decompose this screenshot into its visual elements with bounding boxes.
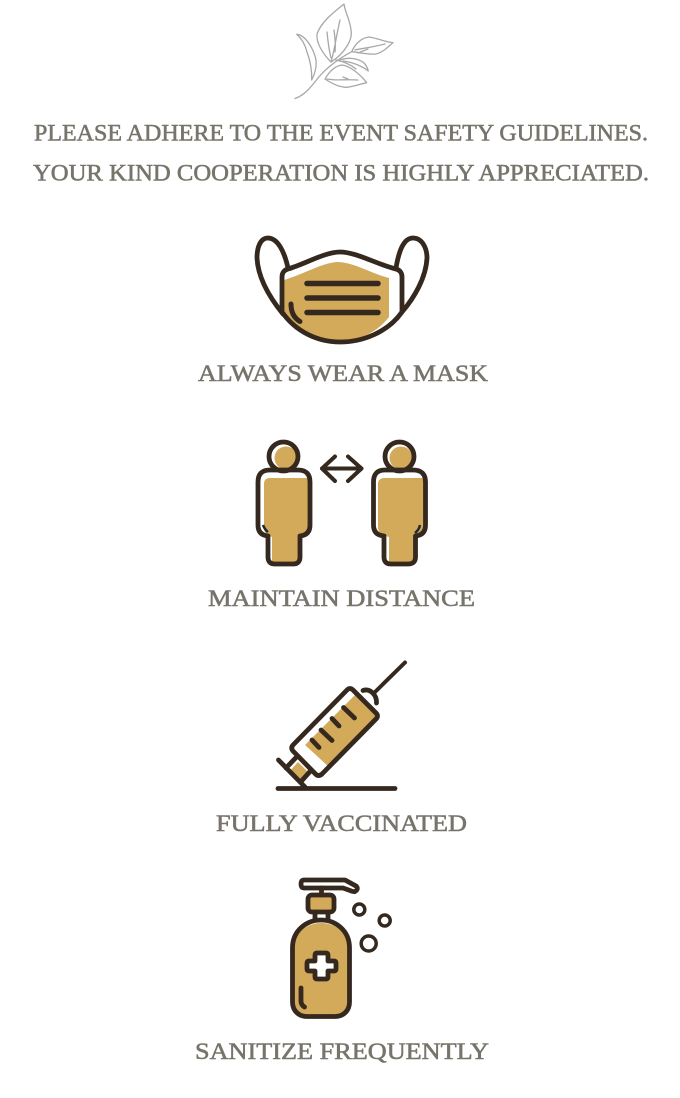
label: distance: MAINTAIN DISTANCE: [208, 586, 475, 612]
icon: syringe: [278, 662, 405, 788]
icon: face mask: [257, 238, 427, 342]
intro text: [33, 120, 649, 186]
icon: two people with distance arrow: [258, 442, 426, 564]
label: sanitize: SANITIZE FREQUENTLY: [195, 1039, 489, 1065]
text line 2: YOUR KIND COOPERATION IS HIGHLY APPRECIATED.: [33, 160, 649, 186]
icon: leaf sprig: [295, 4, 393, 98]
icon: sanitizer bottle: [292, 880, 390, 1016]
label: mask: ALWAYS WEAR A MASK: [198, 361, 488, 387]
label: vaccinated: FULLY VACCINATED: [216, 811, 467, 837]
icon: bubbles: [354, 904, 390, 951]
person left: [258, 442, 310, 564]
arrow: double headed: [322, 456, 362, 481]
text line 1: PLEASE ADHERE TO THE EVENT SAFETY GUIDELINES.: [34, 120, 648, 146]
person right: [374, 442, 426, 564]
icon: medical cross: [307, 953, 336, 979]
